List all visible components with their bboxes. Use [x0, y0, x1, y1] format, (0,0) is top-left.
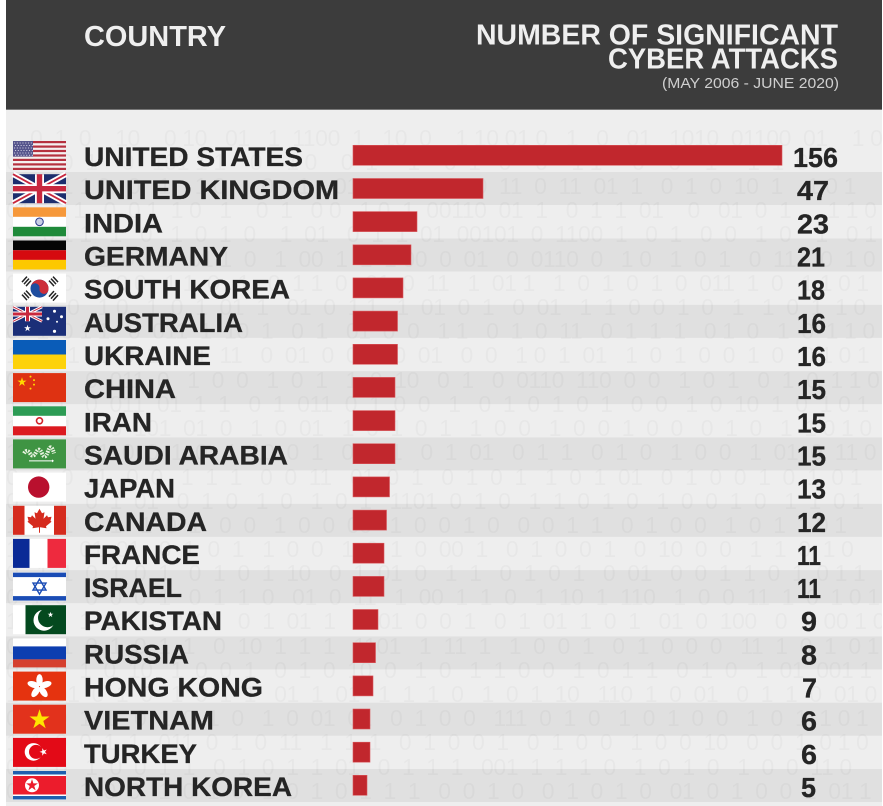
flag: Australia [13, 307, 66, 336]
binary digit background texture: 1 0 1 1 0 0 1 1 0 0 1 01 00 1 1 1 0 11 0 11 01 1 0 1 0 10 1 1 0 1 [6, 173, 856, 199]
binary digit background texture: 1 0 1 01 01 0 1 0 1 1 0 0 1 0 1 0 00 1 0 1 0 0 1 0 10 0 0 1 1 0 1 0 [6, 536, 853, 562]
flag: United Kingdom [13, 174, 66, 203]
flag: France [13, 539, 66, 568]
country labels [84, 142, 339, 802]
country labels: SOUTH KOREA [84, 275, 290, 305]
binary digit background texture: 1 01 0 1 0 0 1 0 1 10 0 1 0 0 1 0 1 01 0 1 1 0 1 0 1 0 0 1 01 0 11 0 [6, 439, 876, 465]
binary digit background texture: 0 1 1 0 1 0 1 0 1 0 1 10 0 1 01 0 1 1 0 1 0 1 0 01 0 0 1 1 0 1 0 1 1 [6, 560, 865, 586]
binary digit background texture: 1 0 1 0 1 1 0 1 0 0 1 0 0 00 1 0 0 1 0 0 0 1 1 0 1 0 0 1 0 1 1 0 1 [6, 512, 847, 538]
attack counts: 18 [797, 275, 825, 306]
alternating row bands [6, 172, 882, 802]
binary digit background texture: 0 1 0 1 1 0 011 1 10 1 0 1 01 0 0 1 1 0 1 0 11 0 1 1 1 0 1 0 1 0 1 1 0 [6, 318, 875, 344]
binary digit background texture: 1 0 1 0 0 101 01 0 1 0 01 1 0 1 0 1 1 0 0 1 0 0 1 0 0 0 1 0 1 1 0 1 0 [6, 415, 872, 441]
country labels: RUSSIA [84, 639, 189, 669]
binary digit background texture: 1 1 0 0 1 1 011 0 1 0 11 1 1 1 0 1 0 0 1 0 1 0 0 1 0 0 10 0 0 1 0 1 0 [6, 729, 868, 755]
binary digit background texture: 0 1 1 0 1 0 1 1 0 10 1 1 1 1101 1 11 1 1 0 0 1 0 1 0 0 0 11 1 0 1 0 1 [6, 633, 879, 659]
attack counts: 13 [797, 474, 826, 505]
flag: Iran [13, 406, 66, 435]
flag: Israel [13, 572, 66, 601]
attack counts [793, 142, 838, 803]
binary digit background texture: 1 0 1 0 011 01 1 1 0 1 011 0 1 0 0 1 0 1 0 1 0 1 0 0 1 0 10 1 0 1 0 1 [6, 391, 869, 417]
bar chart [353, 145, 782, 795]
country labels: SAUDI ARABIA [84, 440, 288, 470]
country labels: PAKISTAN [84, 606, 222, 636]
country labels: HONG KONG [84, 673, 263, 703]
attack counts: 23 [797, 208, 829, 239]
attack counts: 5 [801, 772, 816, 803]
attack counts: 47 [797, 175, 829, 206]
flag: North Korea [13, 771, 66, 800]
country labels: CANADA [84, 507, 207, 537]
binary digit background texture: 0 1 1 0 1 01 0 1 0 1 0 1 0 1 1101 0 1 0 1 1 0 1 0 1 0 0 1 0 1 1 0 1 [6, 488, 864, 514]
binary digit background texture: 0 1 0 1 0 10 1 0 0 1 0 1 0 10 0 1 0 1 1 0 0 1 0 1 1 0 1 0 1 01 001 1 [6, 657, 872, 683]
country labels: IRAN [84, 407, 152, 437]
country labels: TURKEY [84, 739, 197, 769]
binary digit background texture: 1 01 0 1 0 1 0 1 01 1 01 0 1 1 1 01 0 1 0 01 1 1 0 0 1 0 1 1 0 1 1 0 [6, 294, 866, 320]
binary digit background texture: 1 00 1 1 0 1 0 1 11 0 01 0 011 0 01 0 0 1 0 1 01 1 0 1 0 0 1 0 0 1 0 1 [6, 342, 869, 368]
binary digit background texture: 0 0 1 1 0 0 1 0 1 0 1 0 1 0 1 1 1 0 0 1 0 0 1 0 1 0 01 0 1 0 0 1 01 1 [6, 778, 871, 804]
country labels: NORTH KOREA [84, 772, 292, 802]
flag: Canada [13, 506, 66, 535]
binary digit background texture: 0 1 1 0 011 0 1 0 0 1 0 1 1 0 10 0 1 0 0110 110 0 0 1 0 1 0 1 0 1 1 0 [6, 367, 880, 393]
flag: China [13, 373, 66, 402]
flag: India [13, 207, 66, 236]
binary digit background texture: 0 1 0 1 1 0 1 0 1 0 1 0 01 01 0 1 0 0 111 0 1 0 1 0 1 0 0 1 0 1 1 0 1 [6, 705, 868, 731]
binary digit background texture: 0 1 0 10 0 10 01 1 1100 1 10 0 1 10 01 0 1 0 01 1010 01100 01 1 0 1 [30, 125, 883, 151]
binary digit background texture: 0 1 0 0 0 0 1 0 1 1 0 01 0 11 1 00 1 1 0 1 10 1 110 1 0 0 11 1 0 1 0 1 [6, 584, 880, 610]
binary digit background texture: 1 0 1 1 00 1 0 01 0 1 01 1 1 01 0 0 1 0 1 01 1 0 1 01 0 100 0 1 00 1 0 [6, 608, 883, 634]
attack counts: 7 [802, 673, 817, 704]
flag: Russia [13, 638, 66, 667]
flag: Turkey [13, 738, 66, 767]
flag: Ukraine [13, 340, 66, 369]
binary digit background texture: 0 1 0 11 0 0 1 1 1 0 0 11 01 0 1 0 1 0 1 1 0 1 01 0 1 0 0 1 0 1 0 1 [6, 464, 862, 490]
country labels: INDIA [84, 208, 163, 238]
flag: Germany [13, 240, 66, 270]
binary digit background texture: 1 0 1 1 1 0 1 0 1 0 1 01 0 1 1 01 00101 0 1100 1 0 1 0 0 1 0 1 0 1 [6, 221, 877, 247]
heading: number of significant cyber attacks [476, 20, 838, 76]
flag: Saudi Arabia [13, 439, 66, 468]
heading: number of significant cyber attacks: NUMBER OF SIGNIFICANT [476, 20, 838, 52]
country labels: CHINA [84, 374, 176, 404]
binary digit background texture: 1 1 01 0 1 0 1 0 1 1 01 1 01 1 1 1 0 1 0 1 10 110 1 0 01 0 1 1 0 01 0 1 [6, 681, 883, 707]
binary digit background texture: 0 1 0 1 0 101 1 1 0 1 0 0 1 1 0 1 0 0 1 1 0 0 1 1 1 0 [6, 149, 808, 175]
country labels: UNITED STATES [84, 142, 303, 172]
heading: number of significant cyber attacks: CYBER ATTACKS [608, 44, 838, 76]
country labels: UNITED KINGDOM [84, 175, 339, 205]
country labels: GERMANY [84, 242, 228, 272]
attack counts: 15 [797, 374, 826, 405]
flag: Vietnam [13, 705, 66, 734]
attack counts: 8 [801, 639, 817, 670]
flag: United States [13, 141, 66, 170]
binary digit background texture: 0 1 0 1 0 0 1 1 0 1 0 1 1 01 0 1 1 1 001 1 1 1 0 1 0 1 0 1 0 0 11 0 [6, 754, 852, 780]
attack counts: 15 [797, 407, 826, 438]
date range subtitle: (MAY 2006 - JUNE 2020) [662, 75, 839, 92]
country labels: JAPAN [84, 474, 175, 504]
country labels: FRANCE [84, 540, 200, 570]
attack counts: 15 [797, 440, 826, 471]
country labels: AUSTRALIA [84, 308, 243, 338]
flag: Hong Kong [13, 672, 66, 701]
country labels: VIETNAM [84, 706, 214, 736]
attack counts: 9 [801, 606, 817, 637]
flag: Pakistan [13, 605, 66, 634]
binary digit background texture: 01 0 1 0 0 1 1 0 1 0 1 0 0 1 0 1 00110 01 1 0 1 1 01 0 01 0 1 1 1 0 [6, 197, 877, 223]
country labels: ISRAEL [84, 573, 182, 603]
heading: country: COUNTRY [84, 21, 226, 53]
binary digit background texture: 1 0 1 01 0 1 01 1 0 1 00 1 1 1 00 0 01 0 0110 0 1 0 1 0 1 0 11 0 1 0 [6, 246, 875, 272]
flag: Japan [13, 473, 66, 502]
attack counts: 21 [797, 242, 825, 272]
header bar [6, 0, 882, 110]
attack counts: 16 [797, 341, 826, 372]
binary digit background texture: 0 1 0 1 0 0 1 1 0 1 0 1 1 0 01 0 11 1 01 1 1 0 1 0 1 0 011 1 0 1 1 0 1 [6, 270, 869, 296]
attack counts: 6 [801, 739, 817, 770]
attack counts: 12 [797, 507, 826, 538]
country labels: UKRAINE [84, 341, 211, 371]
attack counts: 11 [797, 540, 821, 571]
flag: South Korea [13, 274, 66, 303]
attack counts: 156 [793, 142, 838, 173]
attack counts: 16 [797, 308, 826, 339]
attack counts: 11 [797, 573, 821, 604]
attack counts: 6 [801, 706, 817, 737]
